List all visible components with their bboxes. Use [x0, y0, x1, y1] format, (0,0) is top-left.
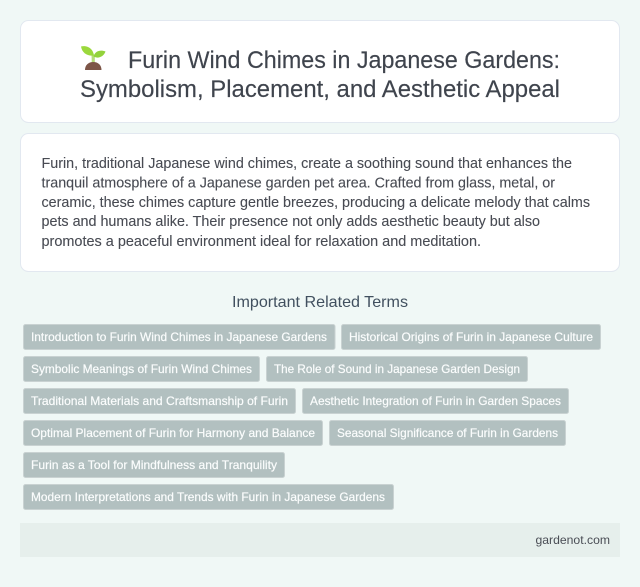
tag: Historical Origins of Furin in Japanese Culture: [349, 330, 593, 344]
tag: Traditional Materials and Craftsmanship of Furin: [31, 394, 288, 408]
tag: Seasonal Significance of Furin in Gardens: [337, 426, 558, 440]
title line 1: Furin Wind Chimes in Japanese Gardens:: [128, 47, 560, 74]
tag: Furin as a Tool for Mindfulness and Tranquility: [31, 458, 277, 472]
tag: Modern Interpretations and Trends with Furin in Japanese Gardens: [31, 490, 385, 504]
panel: intro paragraph: [20, 134, 620, 272]
paragraph text: [42, 156, 590, 250]
paragraph text: ceramic, these chimes capture gentle breezes, producing a delicate melody that calms: [42, 195, 590, 211]
tag: [24, 484, 394, 510]
footer source text: gardenot.com: [536, 533, 610, 547]
paragraph text: promotes a peaceful environment ideal for relaxation and meditation.: [42, 234, 481, 250]
tag: [330, 420, 566, 446]
paragraph text: Furin, traditional Japanese wind chimes, create a soothing sound that enhances the: [42, 156, 572, 172]
tag: [24, 324, 335, 350]
tag: [266, 356, 528, 382]
tag: Symbolic Meanings of Furin Wind Chimes: [31, 362, 252, 376]
tag: [24, 388, 296, 414]
tag: [24, 356, 260, 382]
heading: related terms: Important Related Terms: [232, 294, 408, 311]
tag: Aesthetic Integration of Furin in Garden Spaces: [310, 394, 561, 408]
tag: Introduction to Furin Wind Chimes in Japanese Gardens: [31, 330, 327, 344]
panel: title card: [20, 20, 620, 122]
footer bar: [20, 523, 620, 557]
tag list: [24, 324, 600, 510]
tag: Optimal Placement of Furin for Harmony and Balance: [31, 426, 315, 440]
tag: [24, 420, 322, 446]
tag: The Role of Sound in Japanese Garden Design: [274, 362, 520, 376]
icon: sprout: [81, 46, 106, 70]
tag: [24, 452, 284, 478]
tag: [302, 388, 568, 414]
title line 2: Symbolism, Placement, and Aesthetic Appeal: [80, 76, 560, 103]
paragraph text: tranquil atmosphere of a Japanese garden pet area. Crafted from glass, metal, or: [42, 176, 555, 192]
tag: [342, 324, 600, 350]
paragraph text: pets and humans alike. Their presence not only adds aesthetic beauty but also: [42, 214, 540, 230]
